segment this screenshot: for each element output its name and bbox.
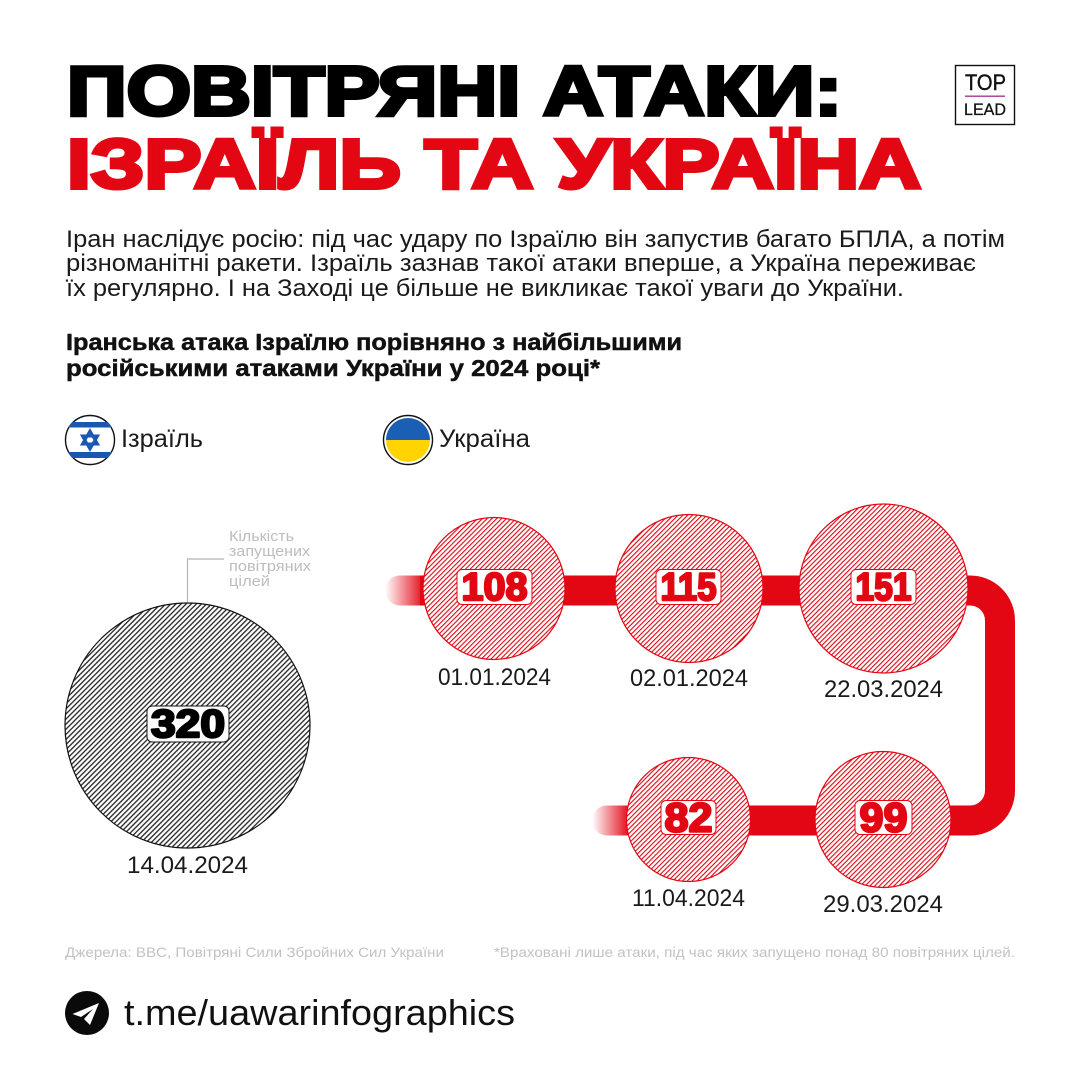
chart heading [66, 329, 682, 381]
circle: 151 on 22.03.2024: 22.03.2024 [824, 676, 943, 703]
circle: 151 on 22.03.2024 [799, 504, 968, 703]
circle: Israel 320: 320 [151, 703, 225, 746]
legend: Israel: Ізраїль [121, 425, 203, 453]
circle: 99 on 29.03.2024: 99 [860, 794, 908, 840]
circle: 151 on 22.03.2024: 151 [856, 566, 912, 609]
circle: 82 on 11.04.2024 [626, 758, 750, 912]
legend: Ukraine: Україна [439, 425, 530, 453]
circle: 115 on 02.01.2024: 115 [660, 566, 716, 609]
intro text [65, 226, 1005, 302]
timeline track [385, 576, 1000, 836]
callout: number of launched targets: цілей [229, 574, 270, 590]
logo: Top Lead [956, 66, 1014, 124]
circle: 82 on 11.04.2024: 82 [664, 794, 712, 840]
legend: Ukraine [384, 416, 530, 464]
telegram link: t.me/uawarinfographics [124, 992, 515, 1033]
callout: number of launched targets: Кількість [229, 529, 294, 545]
title: ІЗРАЇЛЬ ТА УКРАЇНА [67, 125, 921, 203]
chart heading: Іранська атака Ізраїлю порівняно з найбільшими [66, 329, 682, 355]
callout: number of launched targets: повітряних [229, 559, 312, 575]
circle: 115 on 02.01.2024: 02.01.2024 [630, 665, 748, 692]
circle: 108 on 01.01.2024: 01.01.2024 [438, 664, 551, 691]
callout: number of launched targets [188, 529, 312, 602]
circle: 99 on 29.03.2024 [815, 752, 951, 918]
circle: 108 on 01.01.2024: 108 [462, 566, 528, 609]
title [67, 52, 921, 203]
circle: 108 on 01.01.2024 [423, 518, 565, 691]
callout: number of launched targets: запущених [229, 544, 311, 560]
logo: Top Lead: LEAD [964, 100, 1006, 119]
sources: Джерела: BBC, Повітряні Сили Збройних Сил України [65, 944, 444, 960]
logo: Top Lead: TOP [965, 70, 1006, 95]
circle: 115 on 02.01.2024 [615, 514, 763, 692]
circle: 82 on 11.04.2024: 11.04.2024 [632, 885, 745, 912]
circle: Israel 320: 14.04.2024 [127, 852, 248, 879]
title: ПОВІТРЯНІ АТАКИ: [67, 52, 842, 130]
intro text: різноманітні ракети. Ізраїль зазнав такої атаки вперше, а Україна переживає [66, 250, 976, 277]
legend: Israel [66, 416, 203, 464]
circle: Israel 320 [65, 603, 310, 879]
intro text: Іран наслідує росію: під час удару по Ізраїлю він запустив багато БПЛА, а потім [66, 226, 1005, 253]
circle: 99 on 29.03.2024: 29.03.2024 [823, 891, 943, 918]
intro text: їх регулярно. І на Заході це більше не викликає такої уваги до України. [65, 275, 904, 302]
footnote: *Враховані лише атаки, під час яких запущено понад 80 повітряних цілей. [494, 944, 1015, 960]
chart heading: російськими атаками України у 2024 році* [66, 355, 601, 381]
